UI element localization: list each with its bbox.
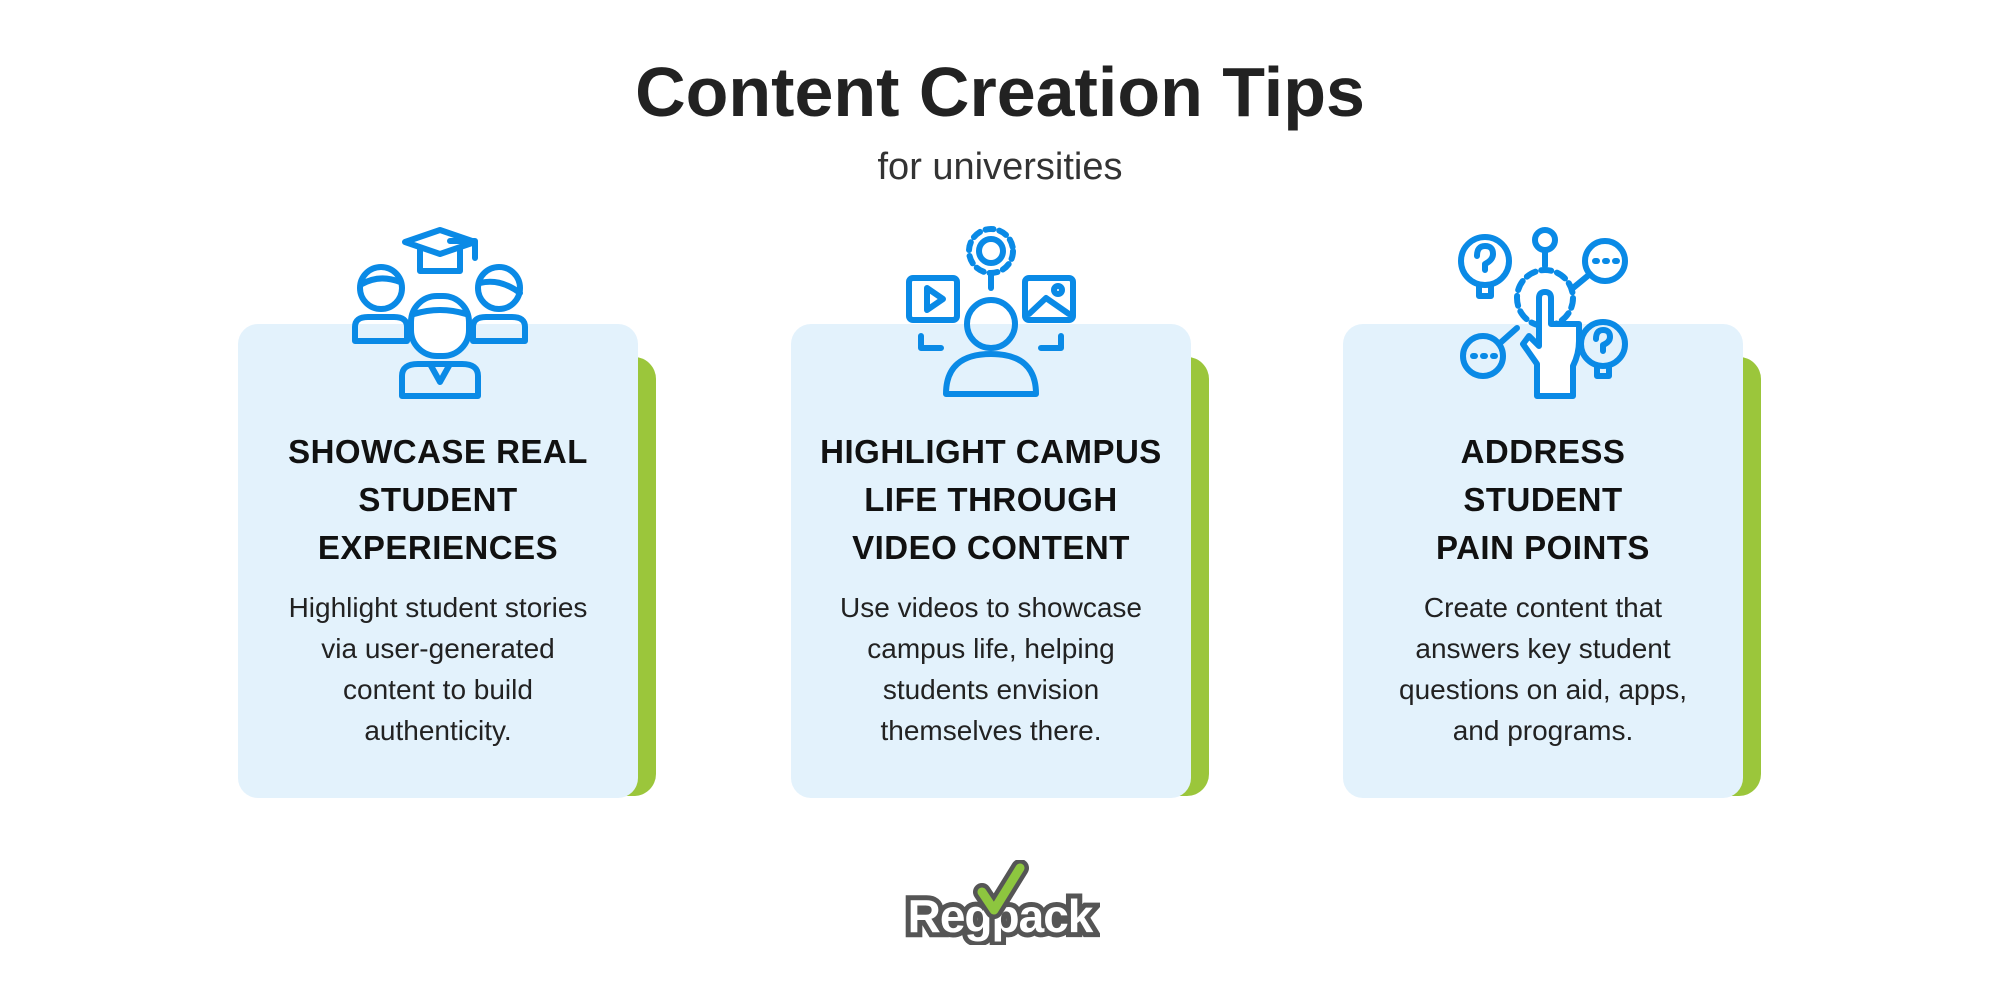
body text bbox=[1399, 592, 1687, 746]
heading bbox=[1436, 433, 1650, 566]
body text: Highlight student stories bbox=[289, 592, 587, 623]
heading: PAIN POINTS bbox=[1436, 529, 1650, 566]
logo: Regpack: Regpack bbox=[908, 890, 1094, 942]
heading bbox=[288, 433, 588, 566]
heading bbox=[820, 433, 1162, 566]
logo: Regpack bbox=[906, 860, 1100, 945]
body text: campus life, helping bbox=[867, 633, 1115, 664]
body text: Use videos to showcase bbox=[840, 592, 1142, 623]
subtitle: for universities bbox=[878, 146, 1122, 188]
body text: answers key student bbox=[1415, 633, 1671, 664]
body text: questions on aid, apps, bbox=[1399, 674, 1687, 705]
body text: students envision bbox=[883, 674, 1099, 705]
body text: and programs. bbox=[1453, 715, 1633, 746]
body text: via user-generated bbox=[321, 633, 555, 664]
title: Content Creation Tips bbox=[635, 53, 1365, 131]
panel: student experiences bbox=[238, 324, 656, 798]
heading: HIGHLIGHT CAMPUS bbox=[820, 433, 1162, 470]
heading: STUDENT bbox=[1463, 481, 1623, 518]
icon: students with grad cap bbox=[352, 227, 528, 399]
heading: STUDENT bbox=[358, 481, 518, 518]
body text: Create content that bbox=[1424, 592, 1662, 623]
body text bbox=[840, 592, 1142, 746]
heading: ADDRESS bbox=[1461, 433, 1625, 470]
body text bbox=[289, 592, 587, 746]
body text: content to build bbox=[343, 674, 533, 705]
panel: pain points bbox=[1343, 324, 1761, 798]
heading: EXPERIENCES bbox=[318, 529, 558, 566]
body text: authenticity. bbox=[364, 715, 512, 746]
body text: themselves there. bbox=[880, 715, 1102, 746]
heading: SHOWCASE REAL bbox=[288, 433, 588, 470]
icon: questions gear hand bbox=[1458, 227, 1628, 399]
icon: person with media bbox=[906, 226, 1076, 397]
heading: VIDEO CONTENT bbox=[852, 529, 1130, 566]
panel: campus life video bbox=[791, 324, 1209, 798]
heading: LIFE THROUGH bbox=[864, 481, 1118, 518]
